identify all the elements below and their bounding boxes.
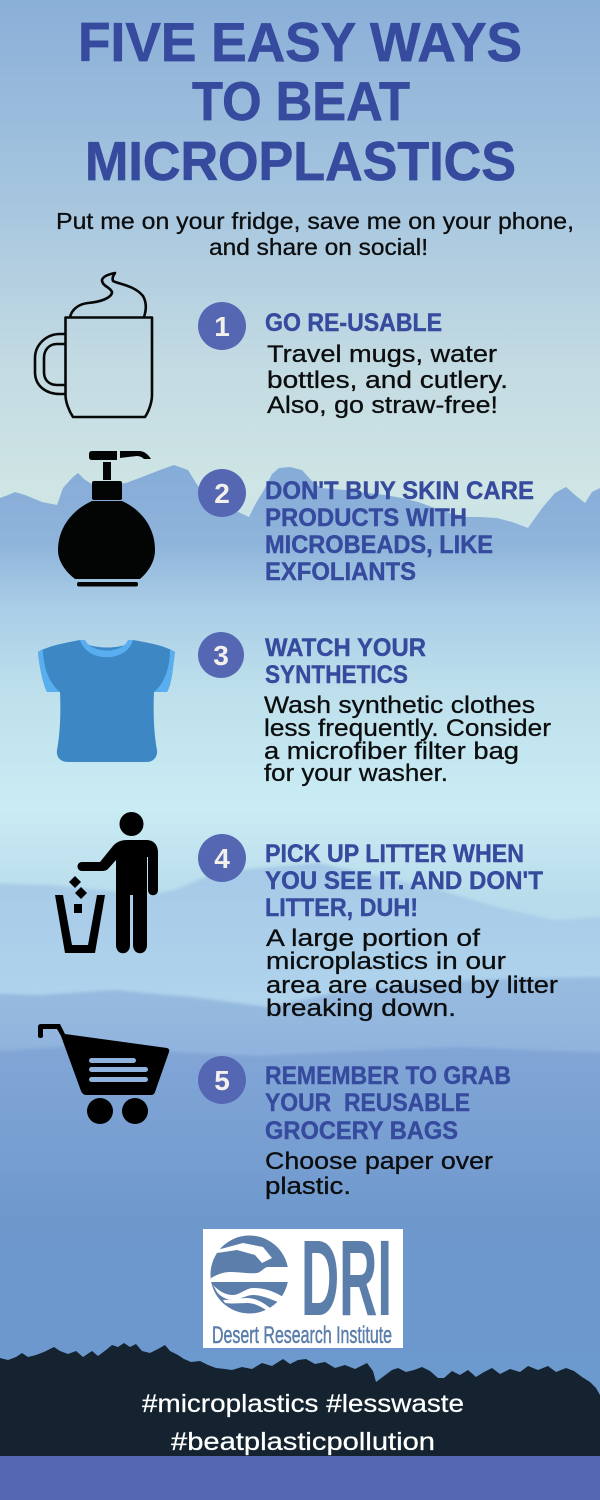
body 3: Wash synthetic clothes [264,692,535,719]
title: TO BEAT [192,70,410,132]
heading 4: PICK UP LITTER WHEN [265,840,524,868]
DRI logo [203,1217,403,1349]
step 1 [198,302,508,419]
step 3 [198,632,551,787]
body 4: microplastics in our [266,948,506,975]
body 3 [264,692,551,787]
body 4: A large portion of [266,925,480,952]
number badge 5: 5 [214,1065,230,1096]
body 5: Choose paper over [265,1148,493,1175]
hashtags: #microplastics #lesswaste [142,1390,464,1418]
heading 4: YOU SEE IT. AND DON'T [265,867,543,895]
heading 3: SYNTHETICS [265,661,408,689]
heading 1: GO RE-USABLE [265,309,442,337]
heading 2: EXFOLIANTS [265,558,416,586]
body 4 [266,925,558,1022]
heading 5: YOUR REUSABLE [265,1089,470,1117]
hashtags [142,1390,464,1456]
icon: person littering [55,812,158,953]
icon: pump bottle [58,451,155,586]
body 4: breaking down. [266,995,456,1022]
icon: coffee mug [35,273,152,417]
DRI logo: DRI [301,1217,392,1338]
logo globe [210,1236,289,1314]
number badge 2: 2 [214,478,230,509]
heading 5: GROCERY BAGS [265,1117,458,1145]
bottom colour bar [0,1456,600,1500]
title [78,11,522,192]
title: MICROPLASTICS [85,130,516,192]
heading 4 [265,840,543,922]
number badge 1: 1 [214,311,230,342]
number badge 1 [198,302,246,350]
heading 2: MICROBEADS, LIKE [265,531,493,559]
number badge 3 [198,632,244,678]
number badge 4 [198,834,246,882]
subtitle [56,208,574,260]
body 1: Also, go straw-free! [267,392,498,419]
body 4: area are caused by litter [266,972,558,999]
number badge 4: 4 [214,843,230,874]
step 4 [198,834,558,1022]
body 3: less frequently. Consider [264,715,551,742]
heading 4: LITTER, DUH! [265,894,418,922]
background mountains [0,465,600,1400]
heading 2 [265,477,534,586]
body 5 [265,1148,493,1200]
heading 5 [265,1062,511,1145]
body 1: Travel mugs, water [267,341,497,368]
heading 2: PRODUCTS WITH [265,504,467,532]
body 3: for your washer. [264,760,448,787]
step 5 [198,1056,511,1200]
logo name: Desert Research Institute [212,1322,392,1349]
number badge 3: 3 [213,640,229,671]
hashtags: #beatplasticpollution [171,1428,435,1456]
title: FIVE EASY WAYS [78,11,522,73]
subtitle: Put me on your fridge, save me on your phone, [56,208,574,234]
body 1 [267,341,508,419]
heading 3 [265,634,426,689]
heading 5: REMEMBER TO GRAB [265,1062,511,1090]
tree line silhouette [0,1343,600,1460]
icon: shopping cart [38,1024,169,1124]
subtitle: and share on social! [209,234,428,260]
step 2 [198,469,534,586]
body 3: a microfiber filter bag [264,738,519,765]
heading 3: WATCH YOUR [265,634,426,662]
heading 2: DON'T BUY SKIN CARE [265,477,534,505]
number badge 2 [198,469,246,517]
number badge 5 [198,1056,246,1104]
icon: t-shirt [38,640,175,762]
body 5: plastic. [265,1173,351,1200]
body 1: bottles, and cutlery. [267,367,508,394]
